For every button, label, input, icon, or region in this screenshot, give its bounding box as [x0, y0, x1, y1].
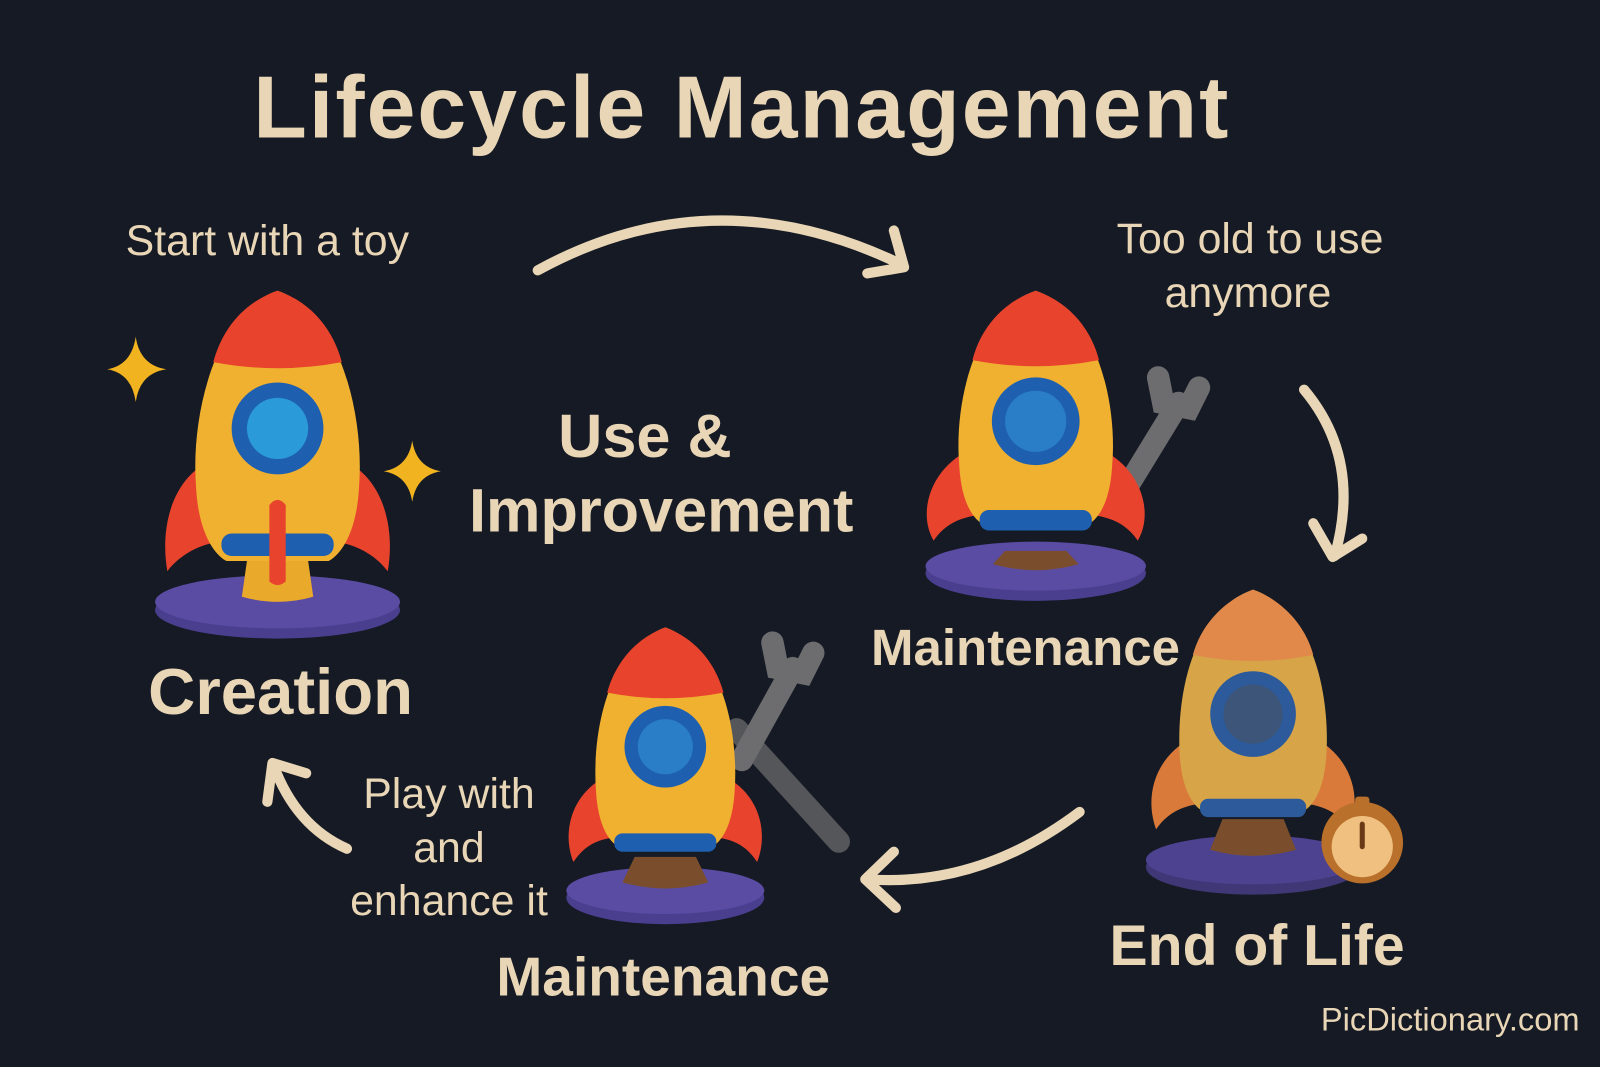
text: too old: Too old to use — [1117, 215, 1383, 263]
text: use & improvement: Improvement — [469, 476, 853, 544]
text: play with — [350, 770, 548, 925]
watermark: PicDictionary.com — [1321, 1000, 1580, 1037]
text: too old — [1117, 215, 1383, 317]
text: start with a toy: Start with a toy — [126, 217, 410, 265]
label: creation: Creation — [148, 655, 413, 728]
label: maintenance 1: Maintenance — [871, 619, 1180, 676]
label: end of life: End of Life — [1110, 914, 1405, 978]
text: use & improvement — [469, 402, 853, 544]
icon: gauge — [1321, 797, 1403, 883]
arrow: top — [538, 221, 904, 273]
text: play with: and — [413, 824, 485, 872]
rocket: maintenance 1 — [926, 291, 1199, 601]
arrow: right — [1304, 390, 1362, 557]
arrow: left — [267, 763, 347, 849]
arrow: bottom — [865, 812, 1080, 908]
text: play with: enhance it — [350, 877, 548, 925]
rocket: maintenance 2 — [566, 627, 839, 924]
rocket: end of life — [1146, 590, 1403, 895]
text: play with: Play with — [363, 770, 535, 818]
icon: sparkles — [107, 337, 441, 502]
title: Lifecycle Management — [253, 59, 1230, 157]
text: too old: anymore — [1165, 269, 1331, 317]
label: maintenance 2: Maintenance — [496, 946, 830, 1008]
rocket: creation — [155, 291, 400, 639]
text: use & improvement: Use & — [558, 402, 732, 470]
